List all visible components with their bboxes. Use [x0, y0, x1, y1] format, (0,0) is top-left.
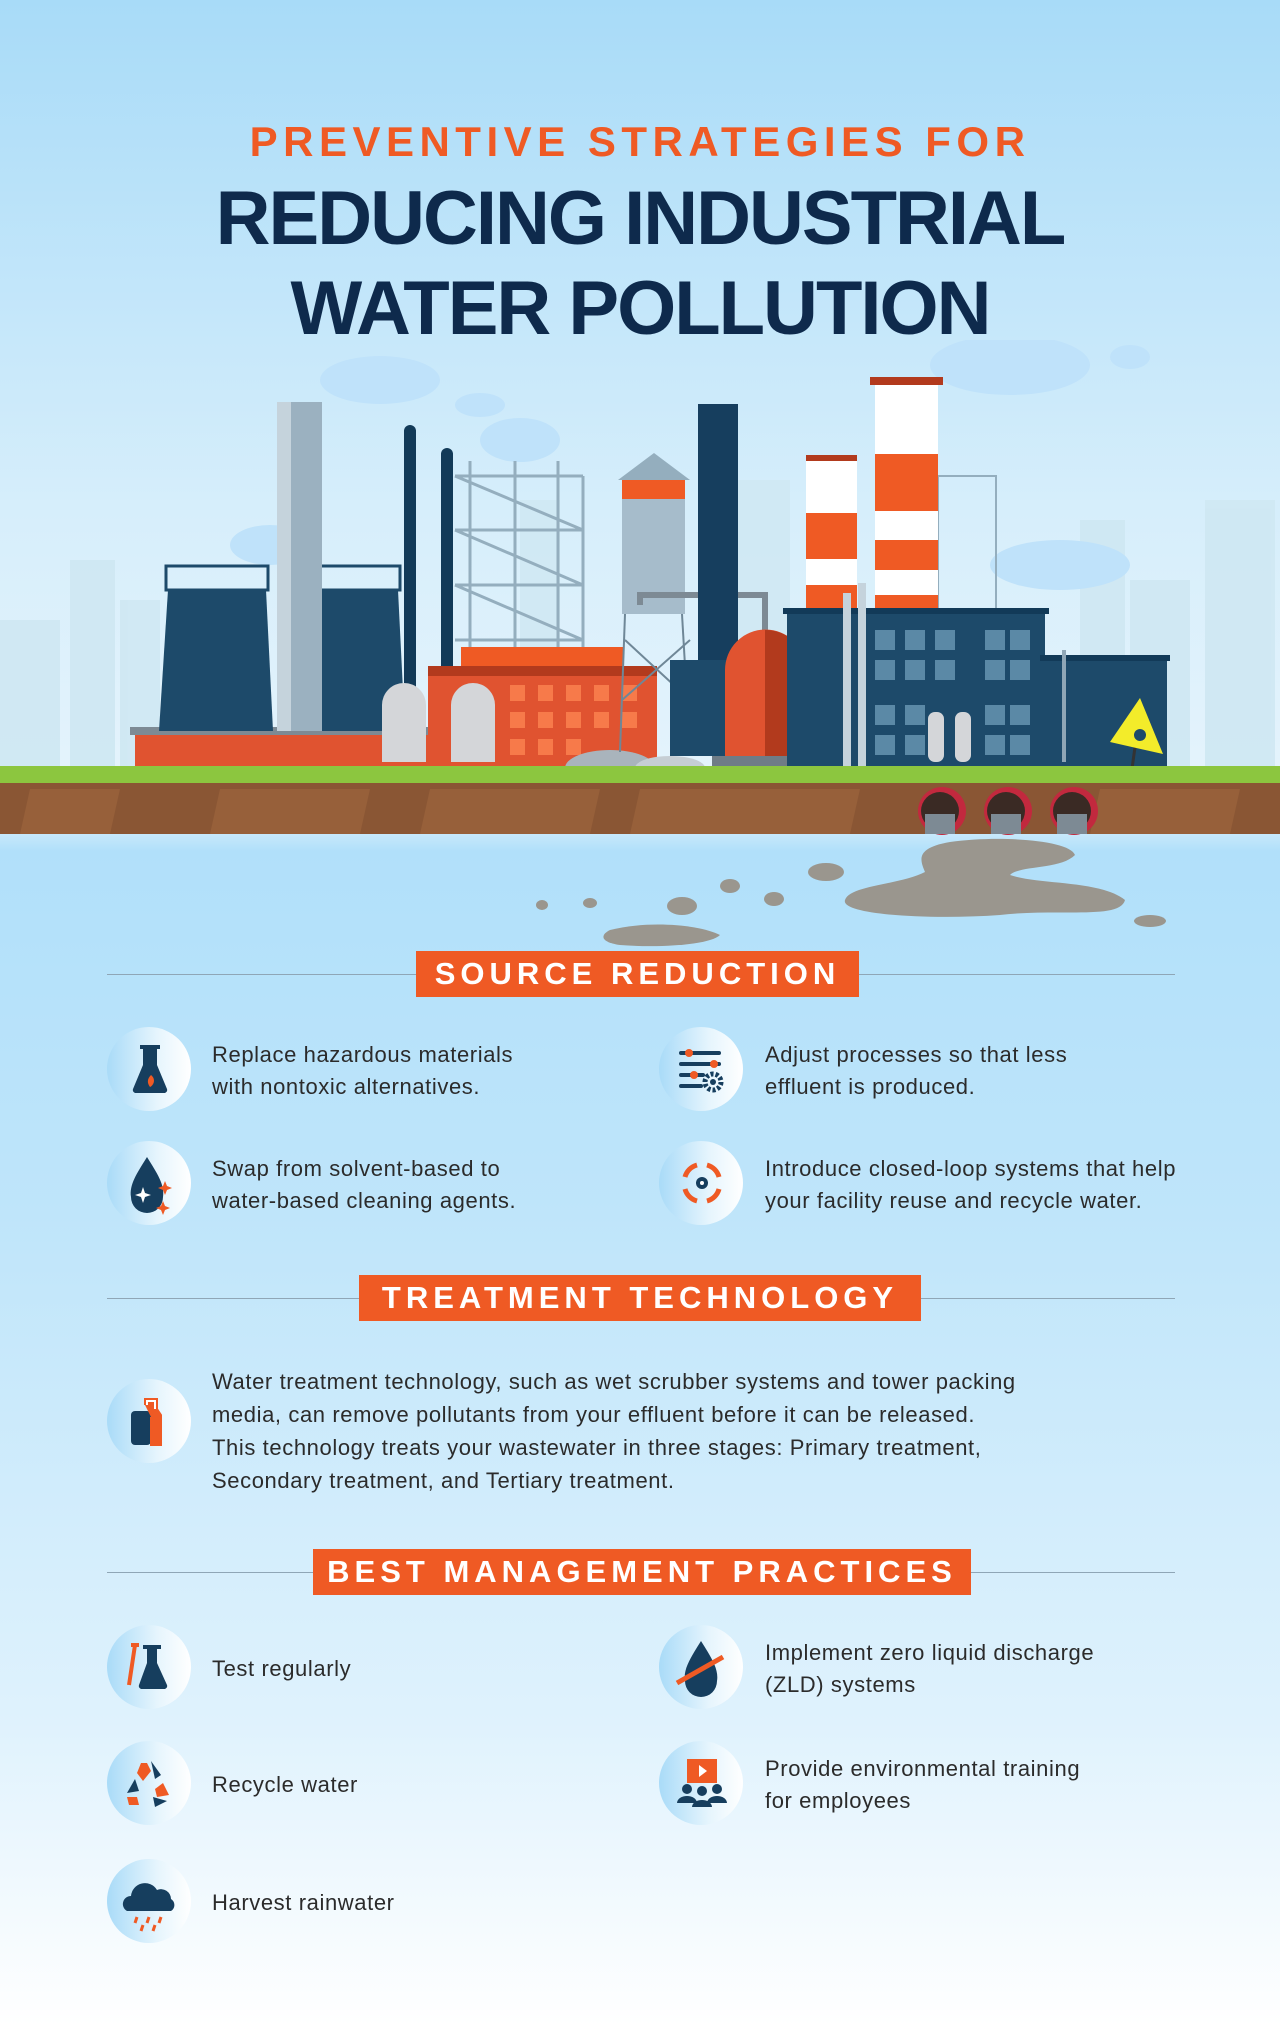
- outlet pipes: [918, 787, 1098, 835]
- text: [212, 1369, 1016, 1493]
- factory illustration: [0, 342, 1280, 946]
- item: recycle water: [107, 1742, 358, 1825]
- text: This technology treats your wastewater in three stages: Primary treatment,: [212, 1435, 982, 1460]
- icon: treatment tank: [107, 1379, 191, 1463]
- icon: crossed drop: [659, 1625, 743, 1709]
- text: [212, 1156, 516, 1213]
- text: Water treatment technology, such as wet scrubber systems and tower packing: [212, 1369, 1016, 1394]
- icon: drop sparkle: [107, 1141, 191, 1225]
- icon: recycle loop: [659, 1141, 743, 1225]
- text: for employees: [765, 1788, 911, 1813]
- item: test regularly: [107, 1626, 351, 1708]
- title: WATER POLLUTION: [290, 266, 989, 351]
- text: with nontoxic alternatives.: [212, 1074, 480, 1099]
- icon: video training: [659, 1741, 743, 1825]
- title: PREVENTIVE STRATEGIES FOR: [250, 118, 1030, 165]
- text: [765, 1156, 1176, 1213]
- item: harvest rainwater: [107, 1859, 395, 1943]
- text: [765, 1042, 1067, 1099]
- item: closed-loop systems: [659, 1141, 1176, 1225]
- heading: treatment technology: TREATMENT TECHNOLOGY: [382, 1280, 898, 1315]
- text: effluent is produced.: [765, 1074, 975, 1099]
- item: zero liquid discharge: [659, 1626, 1094, 1708]
- item: swap cleaning agents: [107, 1141, 516, 1225]
- heading: best management practices: BEST MANAGEMENT PRACTICES: [327, 1554, 957, 1589]
- text: [212, 1042, 513, 1099]
- text: your facility reuse and recycle water.: [765, 1188, 1142, 1213]
- text: Secondary treatment, and Tertiary treatment.: [212, 1468, 675, 1493]
- divider: treatment: [107, 1298, 1175, 1299]
- warning sign: [1110, 698, 1163, 783]
- striped chimneys & navy building: [783, 377, 1170, 766]
- text: Introduce closed-loop systems that help: [765, 1156, 1176, 1181]
- text: [765, 1756, 1080, 1813]
- orange building: [382, 647, 705, 786]
- heading: source reduction: SOURCE REDUCTION: [435, 956, 840, 991]
- text: media, can remove pollutants from your effluent before it can be released.: [212, 1402, 975, 1427]
- item: adjust processes: [659, 1027, 1067, 1111]
- icon: test tubes: [107, 1625, 191, 1709]
- title: [216, 118, 1064, 351]
- text: Swap from solvent-based to: [212, 1156, 500, 1181]
- scaffold: [455, 461, 583, 664]
- icon: rain cloud: [107, 1859, 191, 1943]
- icon: sliders gear: [659, 1027, 743, 1111]
- ground: [0, 766, 1280, 783]
- text: Harvest rainwater: [212, 1890, 395, 1915]
- text: water-based cleaning agents.: [212, 1188, 516, 1213]
- item: replace hazardous materials: [107, 1027, 513, 1111]
- item: treatment technology: [107, 1369, 1016, 1493]
- clouds: [230, 335, 1150, 590]
- text: Provide environmental training: [765, 1756, 1080, 1781]
- divider: bmp: [107, 1572, 1175, 1573]
- text: [765, 1640, 1094, 1697]
- text: Implement zero liquid discharge: [765, 1640, 1094, 1665]
- item: training: [659, 1742, 1080, 1825]
- skyline: [0, 480, 1275, 770]
- heading: treatment technology: [359, 1275, 921, 1321]
- text: Test regularly: [212, 1656, 351, 1681]
- icon: recycle: [107, 1741, 191, 1825]
- text: Adjust processes so that less: [765, 1042, 1067, 1067]
- water tower: [618, 404, 822, 766]
- cooling towers: [130, 402, 453, 766]
- text: Recycle water: [212, 1772, 358, 1797]
- heading: source reduction: [416, 951, 859, 997]
- divider: source reduction: [107, 974, 1175, 975]
- pollution: [536, 839, 1166, 946]
- text: Replace hazardous materials: [212, 1042, 513, 1067]
- text: (ZLD) systems: [765, 1672, 916, 1697]
- title: REDUCING INDUSTRIAL: [216, 176, 1064, 261]
- icon: flask: [107, 1027, 191, 1111]
